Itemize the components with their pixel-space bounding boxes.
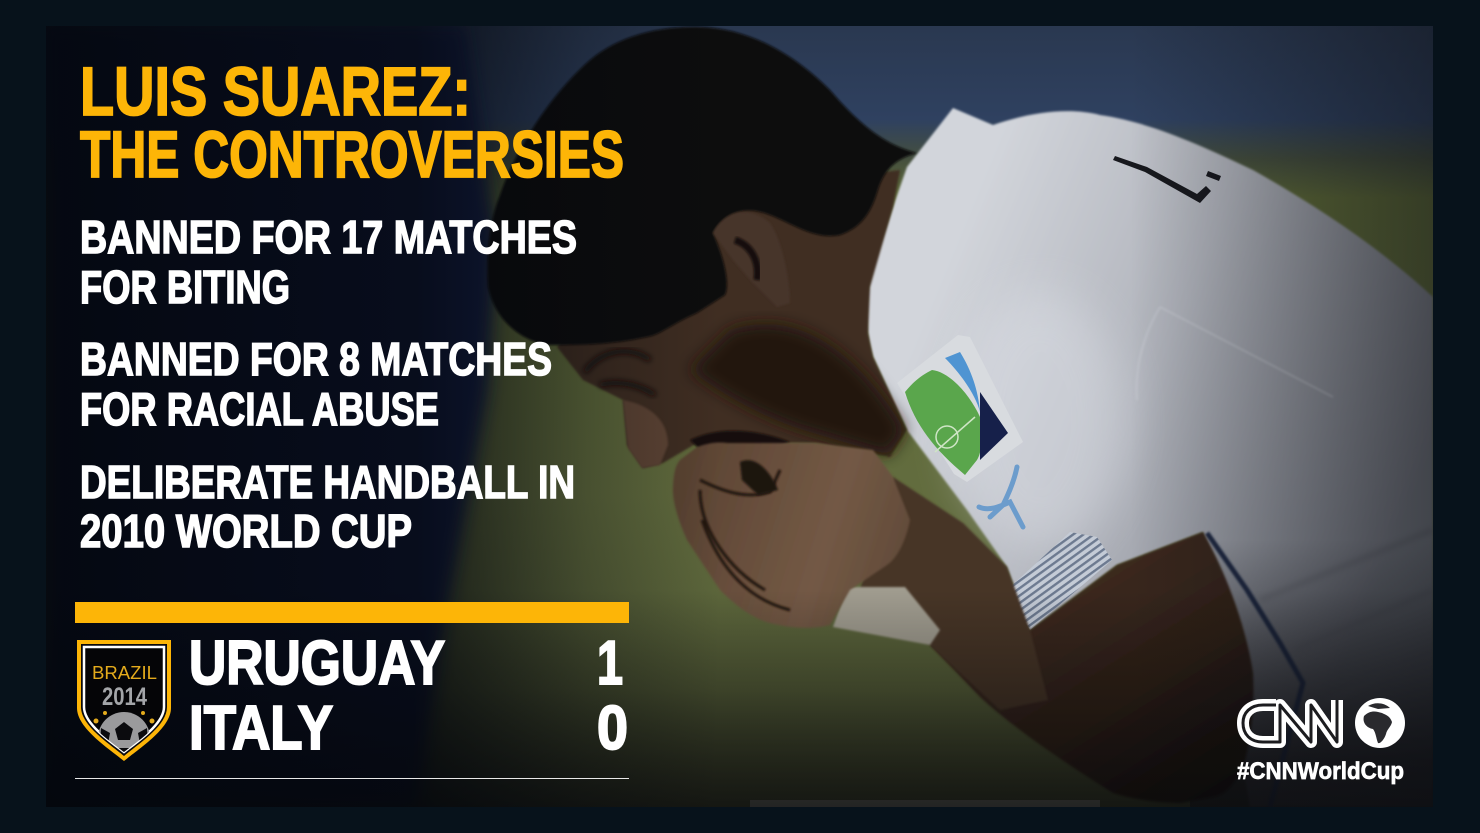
lower shirt folds xyxy=(1260,530,1433,710)
title: LUIS SUAREZ: xyxy=(80,53,471,130)
item: racial abuse: BANNED FOR 8 MATCHES xyxy=(80,333,552,385)
Uruguay score: 1 xyxy=(597,629,623,698)
ear xyxy=(713,212,790,307)
blue player on the left xyxy=(102,40,500,720)
puma logo xyxy=(979,467,1023,527)
hand xyxy=(673,442,910,628)
item: biting xyxy=(80,211,577,313)
wrist tape xyxy=(833,587,940,645)
icon: globe xyxy=(1355,698,1405,748)
item: handball: 2010 WORLD CUP xyxy=(80,505,412,557)
scoreboard xyxy=(189,629,628,763)
title xyxy=(80,53,624,191)
faint white shape at the bottom edge xyxy=(750,800,1100,807)
item: biting: FOR BITING xyxy=(80,261,290,313)
icon: Brazil 2014 badge: BRAZIL xyxy=(92,663,157,683)
finger creases and shadows xyxy=(700,470,790,610)
CNN logo with globe xyxy=(1243,698,1405,748)
item: racial abuse xyxy=(80,333,552,435)
Italy score: 0 xyxy=(597,694,628,763)
icon: Brazil 2014 badge xyxy=(77,640,171,764)
lower torso shadow xyxy=(1190,540,1433,807)
icon: Brazil 2014 badge: 2014 xyxy=(102,683,147,711)
title: THE CONTROVERSIES xyxy=(80,117,624,191)
CNN wordmark xyxy=(1243,700,1337,742)
Italy score xyxy=(189,694,628,763)
sleeve highlight xyxy=(955,290,1125,550)
Uruguay score: URUGUAY xyxy=(189,629,445,698)
controversies list xyxy=(80,211,577,557)
beard and jaw shading xyxy=(690,324,905,455)
hair xyxy=(488,27,917,345)
item: biting: BANNED FOR 17 MATCHES xyxy=(80,211,577,263)
item: handball: DELIBERATE HANDBALL IN xyxy=(80,456,575,508)
thin white rule xyxy=(75,778,629,779)
mouth and palm shadow xyxy=(740,460,778,495)
sleeve cuff xyxy=(1007,532,1112,630)
Italy score: ITALY xyxy=(189,694,333,763)
shirt side panel seam xyxy=(1192,323,1332,397)
face xyxy=(557,170,907,468)
overall shading xyxy=(260,602,1433,807)
mouth xyxy=(690,430,790,448)
patch: football for hope xyxy=(897,335,1023,482)
hashtag: #CNNWorldCup xyxy=(1237,758,1404,785)
shirt side seam dark line xyxy=(1204,530,1306,746)
item: handball xyxy=(80,456,575,557)
shirt name print xyxy=(1113,156,1221,203)
shirt torso and sleeve xyxy=(867,108,1433,807)
item: racial abuse: FOR RACIAL ABUSE xyxy=(80,383,439,435)
nose xyxy=(623,400,668,468)
stadium and pitch background xyxy=(432,26,1433,807)
forearm xyxy=(860,477,1048,710)
ear inner shadow xyxy=(735,240,758,280)
yellow divider bar xyxy=(75,602,629,623)
upper arm xyxy=(930,532,1253,803)
eye crease xyxy=(585,351,655,395)
